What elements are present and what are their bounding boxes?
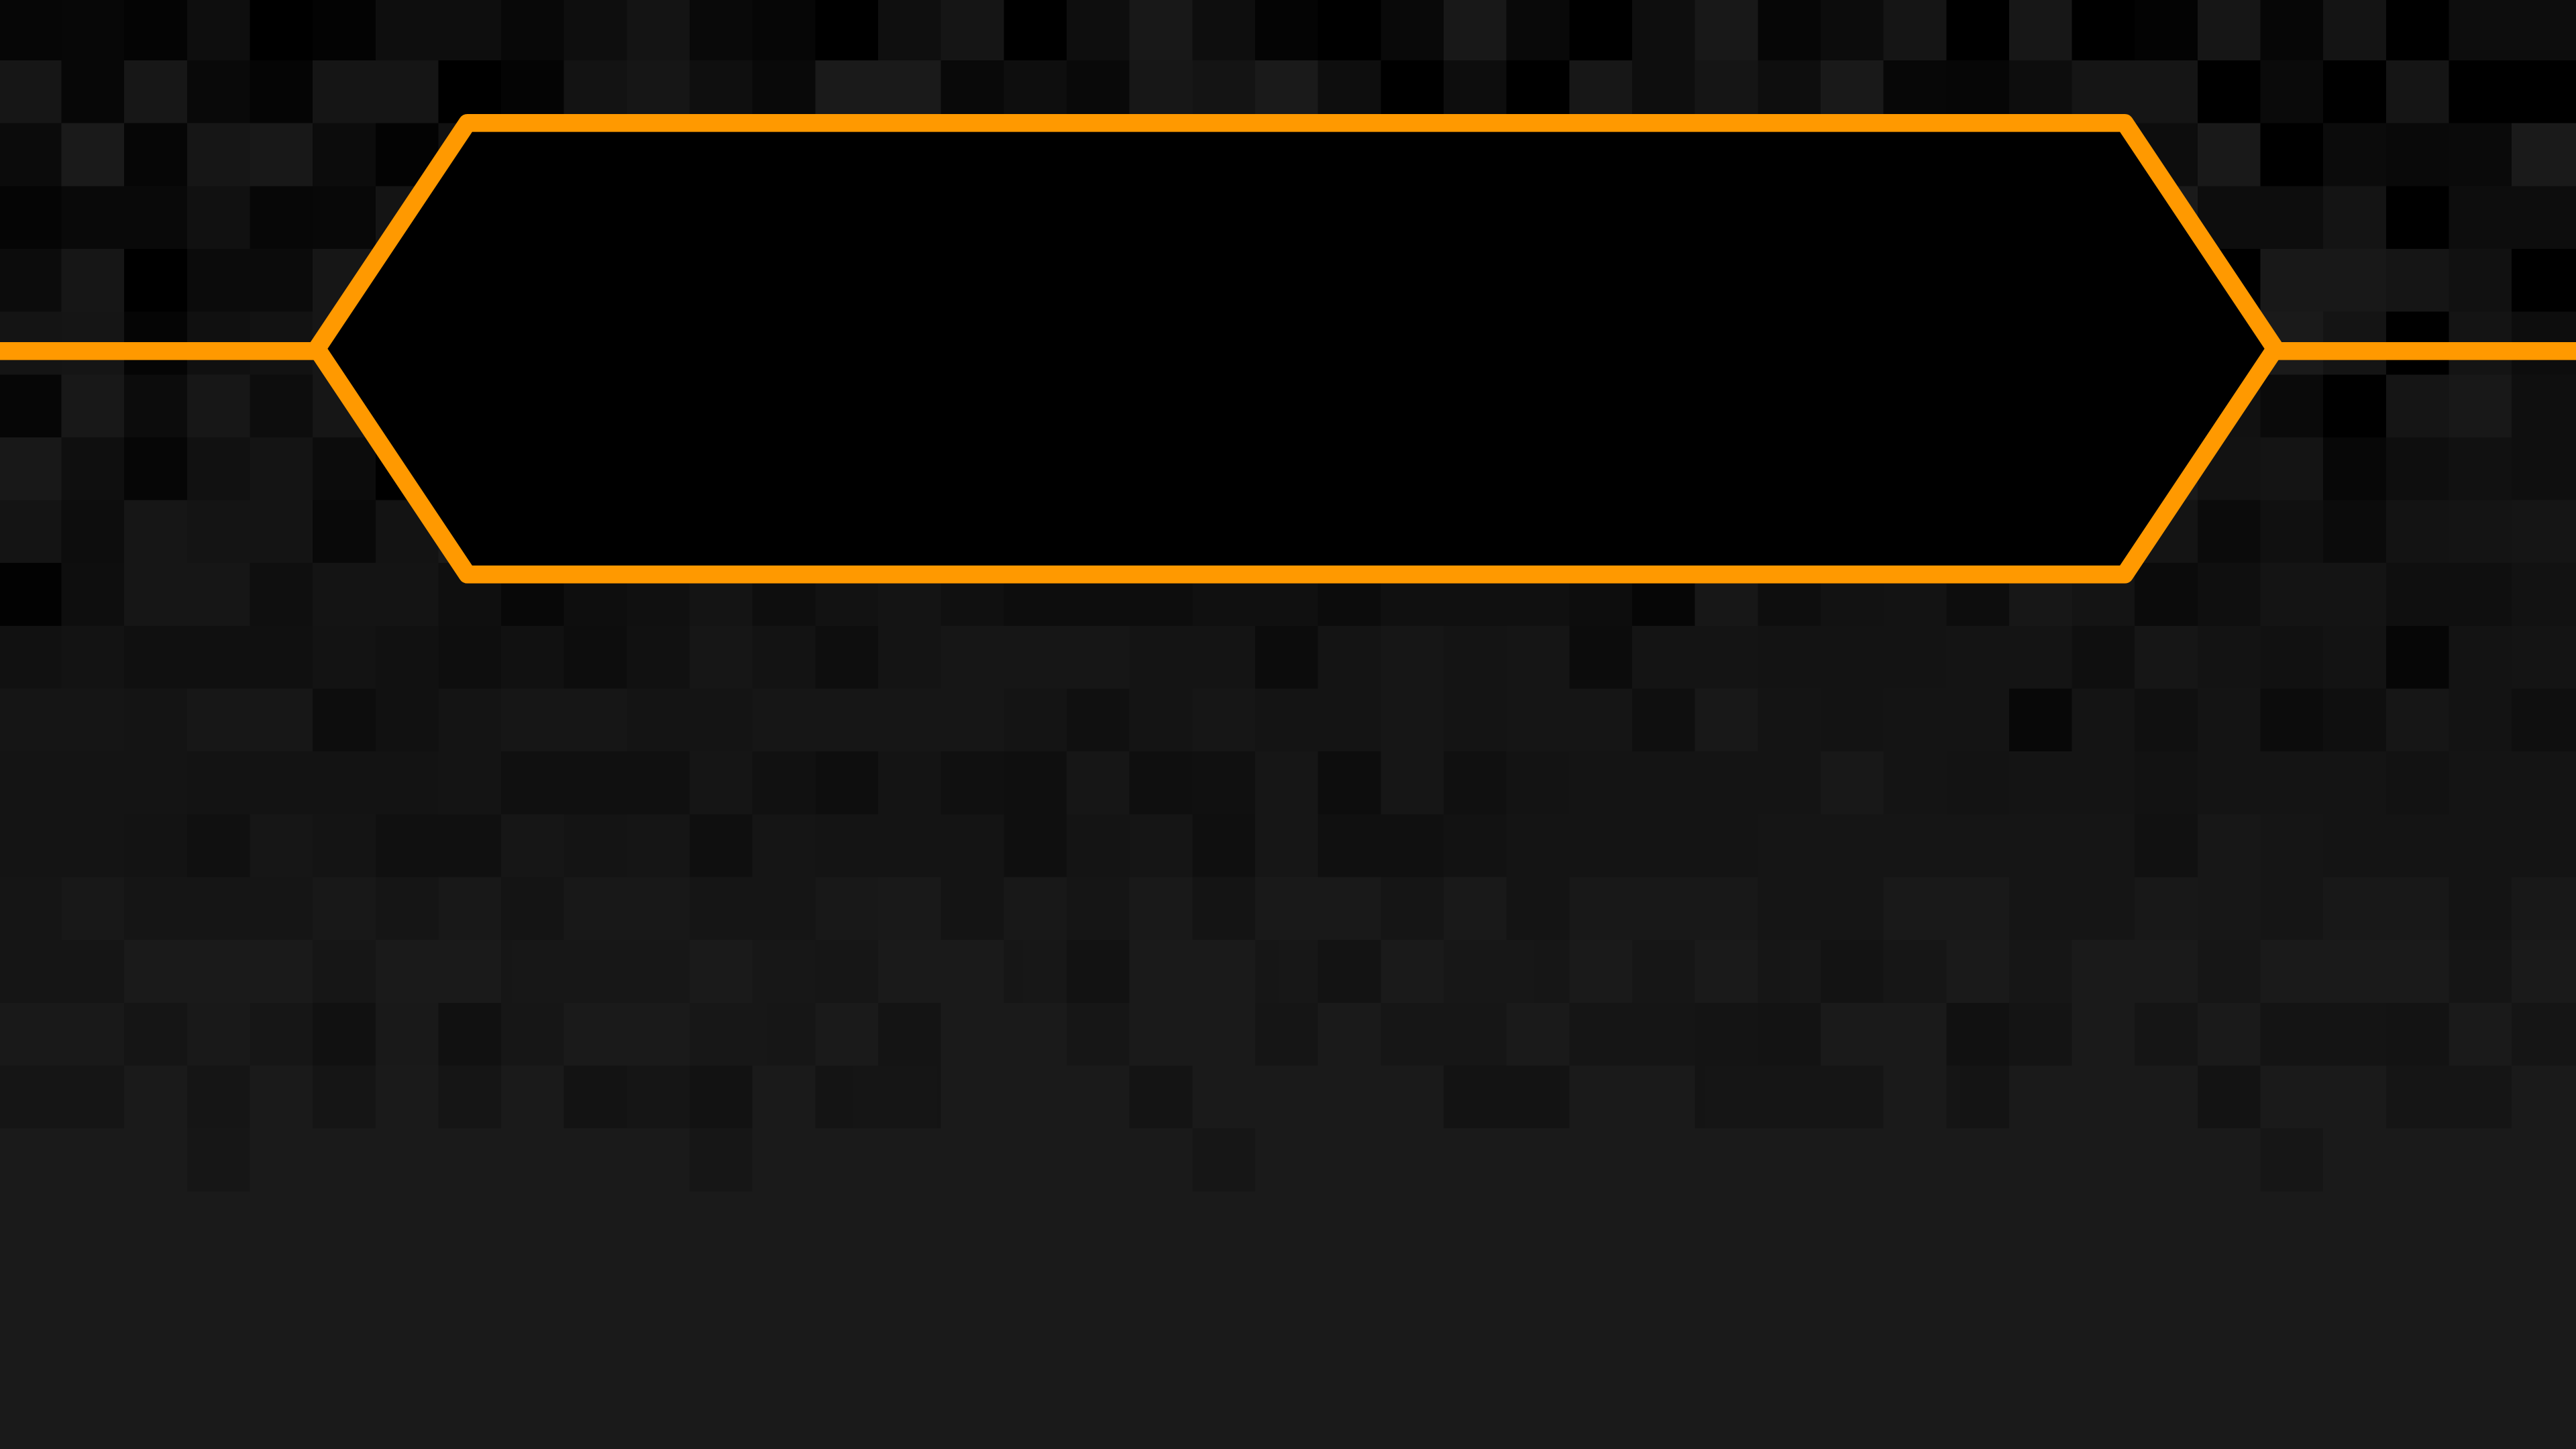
panel: black hexagon banner with orange outline: [317, 123, 2275, 574]
connector: right horizontal line: [2275, 342, 2576, 360]
connector: left horizontal line: [0, 342, 317, 360]
